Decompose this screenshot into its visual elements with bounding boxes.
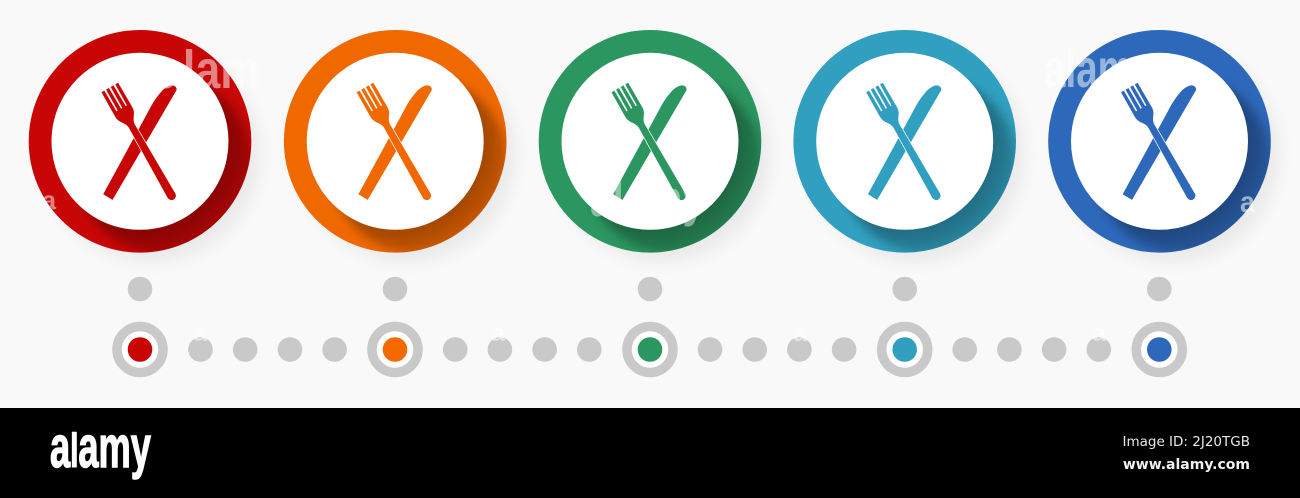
watermarks: a (42, 185, 57, 215)
watermarks: a (1240, 186, 1255, 219)
icon: orange fork and knife badge (284, 30, 515, 262)
watermarks: alam (158, 40, 260, 100)
image id: Image ID: 2J20TGB (1122, 434, 1250, 450)
watermarks: a (1092, 320, 1107, 347)
footer bar (0, 408, 1300, 498)
icon: green fork and knife badge (539, 30, 770, 262)
alamy logo: alamy (50, 415, 151, 480)
timeline node: green (627, 326, 673, 372)
watermarks (42, 39, 1255, 347)
timeline node: orange (372, 326, 418, 372)
website url: www.alamy.com (1123, 457, 1250, 473)
icon: red fork and knife badge (29, 30, 260, 262)
timeline node: blue (1136, 326, 1182, 372)
timeline node: red (117, 326, 163, 372)
watermarks: a (793, 320, 808, 347)
top marker dots (128, 277, 1172, 301)
timeline node: teal (882, 326, 928, 372)
icon: blue fork and knife badge (1048, 30, 1280, 262)
watermarks: a (193, 320, 208, 347)
watermarks: a (491, 320, 506, 347)
timeline connector dots (188, 337, 1111, 362)
icon: teal fork and knife badge (793, 30, 1025, 262)
watermarks: alam (1044, 39, 1132, 99)
watermarks: alamy (590, 171, 705, 227)
